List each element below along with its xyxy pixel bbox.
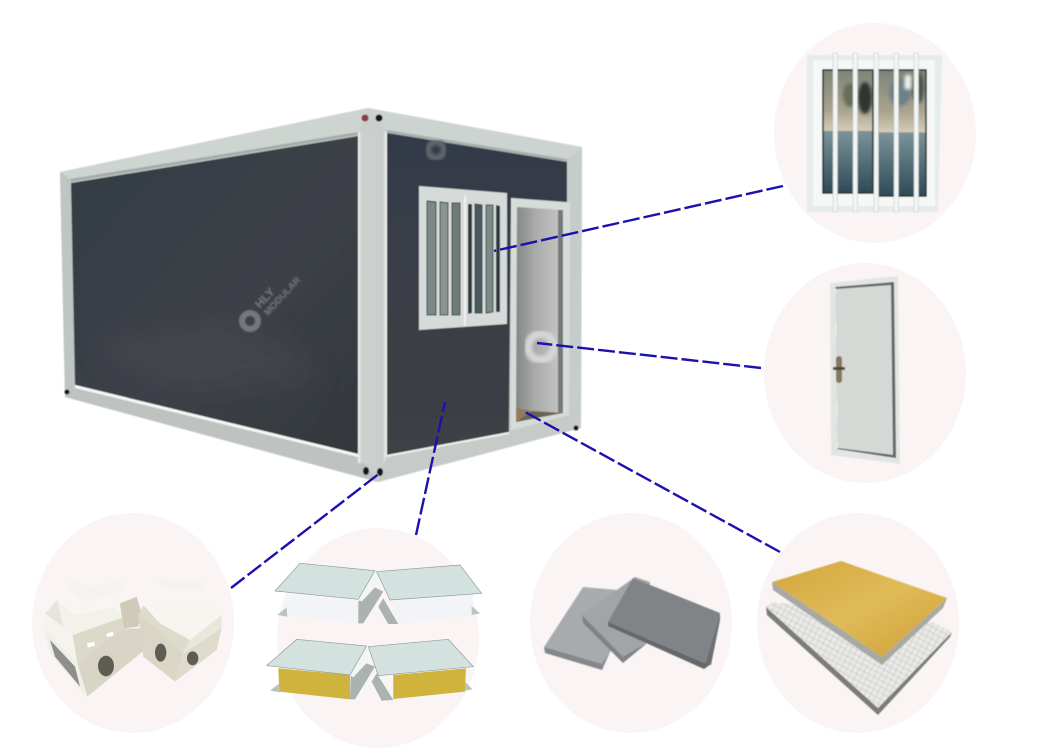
right dark wall panel	[387, 133, 567, 455]
bottom front beam	[378, 415, 581, 482]
icon: cement boards	[544, 577, 720, 670]
watermark: front wall	[428, 142, 444, 158]
top left beam	[60, 108, 368, 182]
window reflections	[843, 72, 924, 114]
wall lighter patch	[100, 320, 320, 395]
icon: corner fittings	[43, 578, 222, 697]
left end post	[60, 172, 75, 397]
icon: sliding window	[807, 53, 942, 212]
callout: window	[494, 186, 783, 251]
callout: wall panel	[416, 402, 445, 535]
left fitting	[43, 580, 143, 697]
callout: door	[537, 343, 761, 368]
right corner post	[567, 147, 582, 428]
bolt holes	[64, 114, 578, 476]
circle: corner fittings	[32, 513, 234, 733]
icon: door	[830, 276, 900, 464]
window on wall	[419, 186, 507, 330]
container frame silhouette	[60, 108, 582, 482]
right fitting	[138, 578, 222, 682]
open door frame	[511, 198, 570, 430]
watermark: left wall: MODULAR	[262, 275, 303, 318]
callout lines	[231, 186, 783, 588]
container house	[60, 108, 582, 482]
bottom left beam	[65, 385, 378, 482]
circle: window	[774, 23, 976, 243]
left dark wall panel	[71, 136, 358, 454]
circle: rock wool boards	[757, 513, 959, 733]
icon: EPS sandwich panels	[275, 563, 482, 624]
watermark: door	[528, 334, 554, 360]
circle: sandwich panels	[267, 528, 482, 748]
icon: rock wool sandwich panels	[267, 639, 473, 701]
circle: cement boards	[530, 513, 732, 733]
watermark: left wall	[242, 275, 303, 329]
watermark: left wall: HLY	[252, 285, 278, 311]
door handle	[833, 356, 845, 383]
callout: corner fitting	[231, 473, 380, 588]
icon: foil and rock wool boards	[766, 561, 952, 715]
corner post	[358, 132, 387, 463]
center block	[120, 597, 142, 628]
top front beam	[368, 108, 582, 162]
circle: door	[764, 263, 966, 483]
callout: floor	[525, 412, 780, 552]
